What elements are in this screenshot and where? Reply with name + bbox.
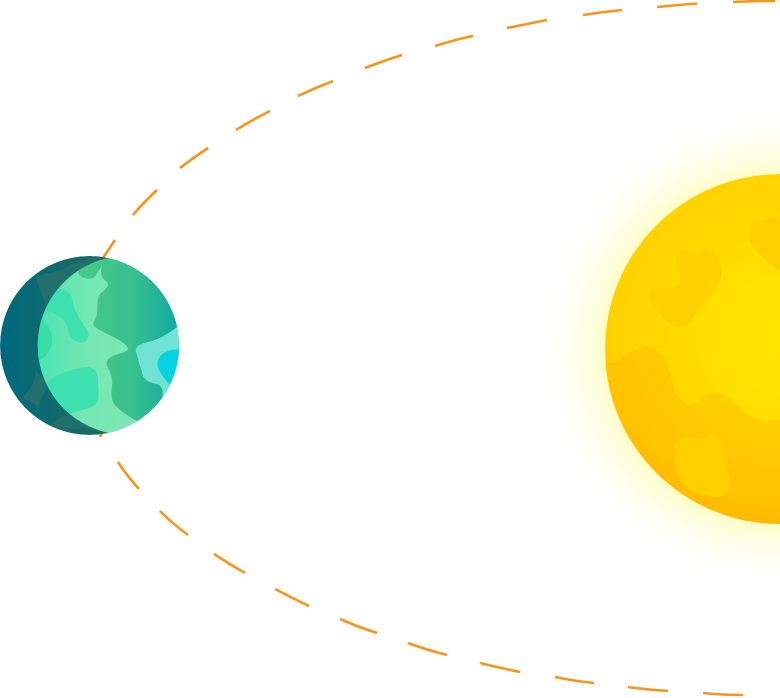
earth <box>0 256 179 435</box>
land patch top left <box>42 289 88 343</box>
sun disc <box>605 174 780 524</box>
cyan land <box>158 349 179 385</box>
sun lower shaded region <box>600 347 780 530</box>
sun spot: lower <box>674 435 730 497</box>
ocean <box>78 258 179 422</box>
land base <box>38 258 179 433</box>
sun spot: upper right <box>750 218 780 272</box>
land patch left <box>38 320 52 360</box>
earth lit side <box>38 258 179 433</box>
earth shadow crescent <box>0 254 179 435</box>
light blue land <box>136 327 179 397</box>
sun spot: upper left <box>670 250 721 327</box>
shadow land patches <box>23 254 100 431</box>
land patch lower left <box>46 367 99 414</box>
sun <box>600 174 780 530</box>
sun glow <box>548 117 780 581</box>
